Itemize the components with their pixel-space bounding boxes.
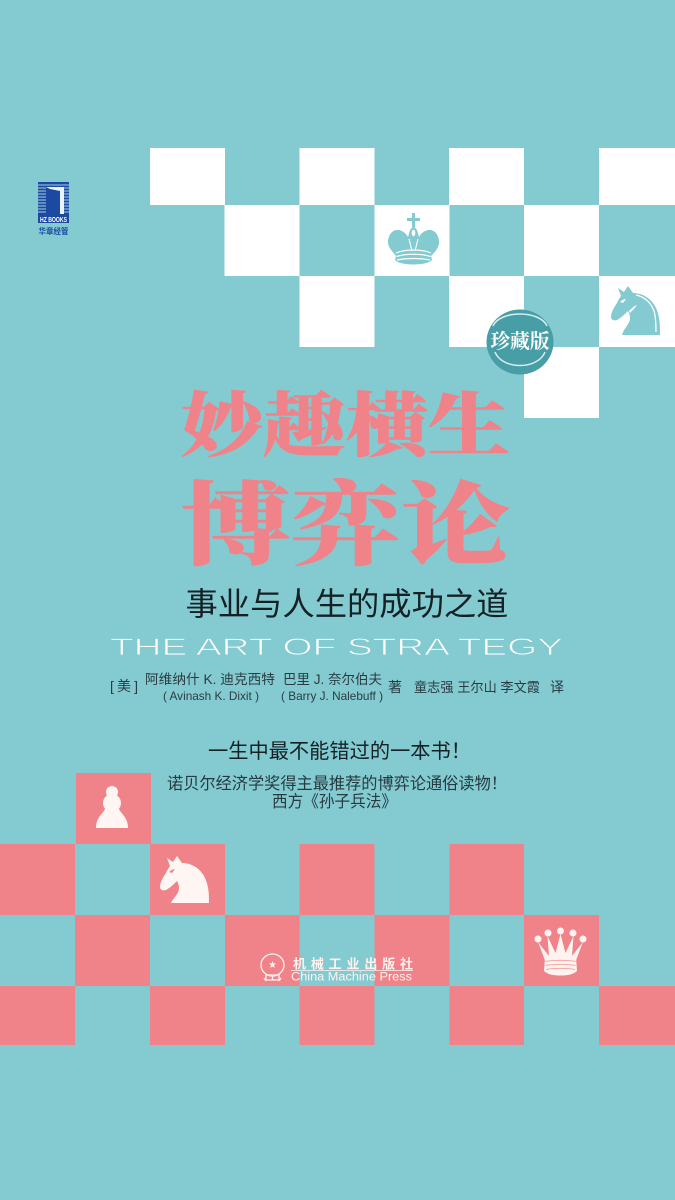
press logo [261,954,413,984]
title line 2: 博弈论 [181,476,510,577]
icon: pawn [96,786,128,828]
press name english: China Machine Press [291,972,412,984]
white chessboard [150,148,675,418]
publisher logo: HZ Books [38,182,69,236]
authors block: ( Barry J. Nalebuff ) [281,689,383,703]
endorsement text: 西方《孙子兵法》 [272,792,397,811]
authors block: ( Avinash K. Dixit ) [163,689,259,703]
publisher logo: HZ Books: 华章经管 [38,226,68,236]
authors block: 著 [388,679,402,695]
tagline: 一生中最不能错过的一本书！ [208,740,471,763]
authors block: [ 美 ] [110,678,138,694]
authors block: 译 [550,679,564,695]
endorsement text: 诺贝尔经济学奖得主最推荐的博弈论通俗读物！ [167,774,507,793]
icon: queen [534,928,586,976]
english title: THE ART OF STRA TEGY [110,634,563,661]
authors block [110,672,564,703]
authors block: 阿维纳什 K. 迪克西特 [145,672,275,687]
icon: knight (top right) [611,286,660,335]
title line 1: 妙趣横生 [181,389,510,466]
badge: collector edition [486,310,554,374]
icon: knight (pink square) [160,856,209,903]
press name: 机械工业出版社 [293,956,413,972]
icon: king [388,213,439,264]
authors block: 巴里 J. 奈尔伯夫 [283,672,382,687]
endorsement text [167,774,507,811]
authors block: 童志强 王尔山 李文霞 [414,679,540,695]
publisher logo: HZ Books: HZ BOOKS [40,217,67,224]
pink chessboard [0,773,675,1045]
badge: collector edition: 珍藏版 [490,330,550,353]
subtitle: 事业与人生的成功之道 [186,586,508,622]
press emblem [261,954,284,981]
